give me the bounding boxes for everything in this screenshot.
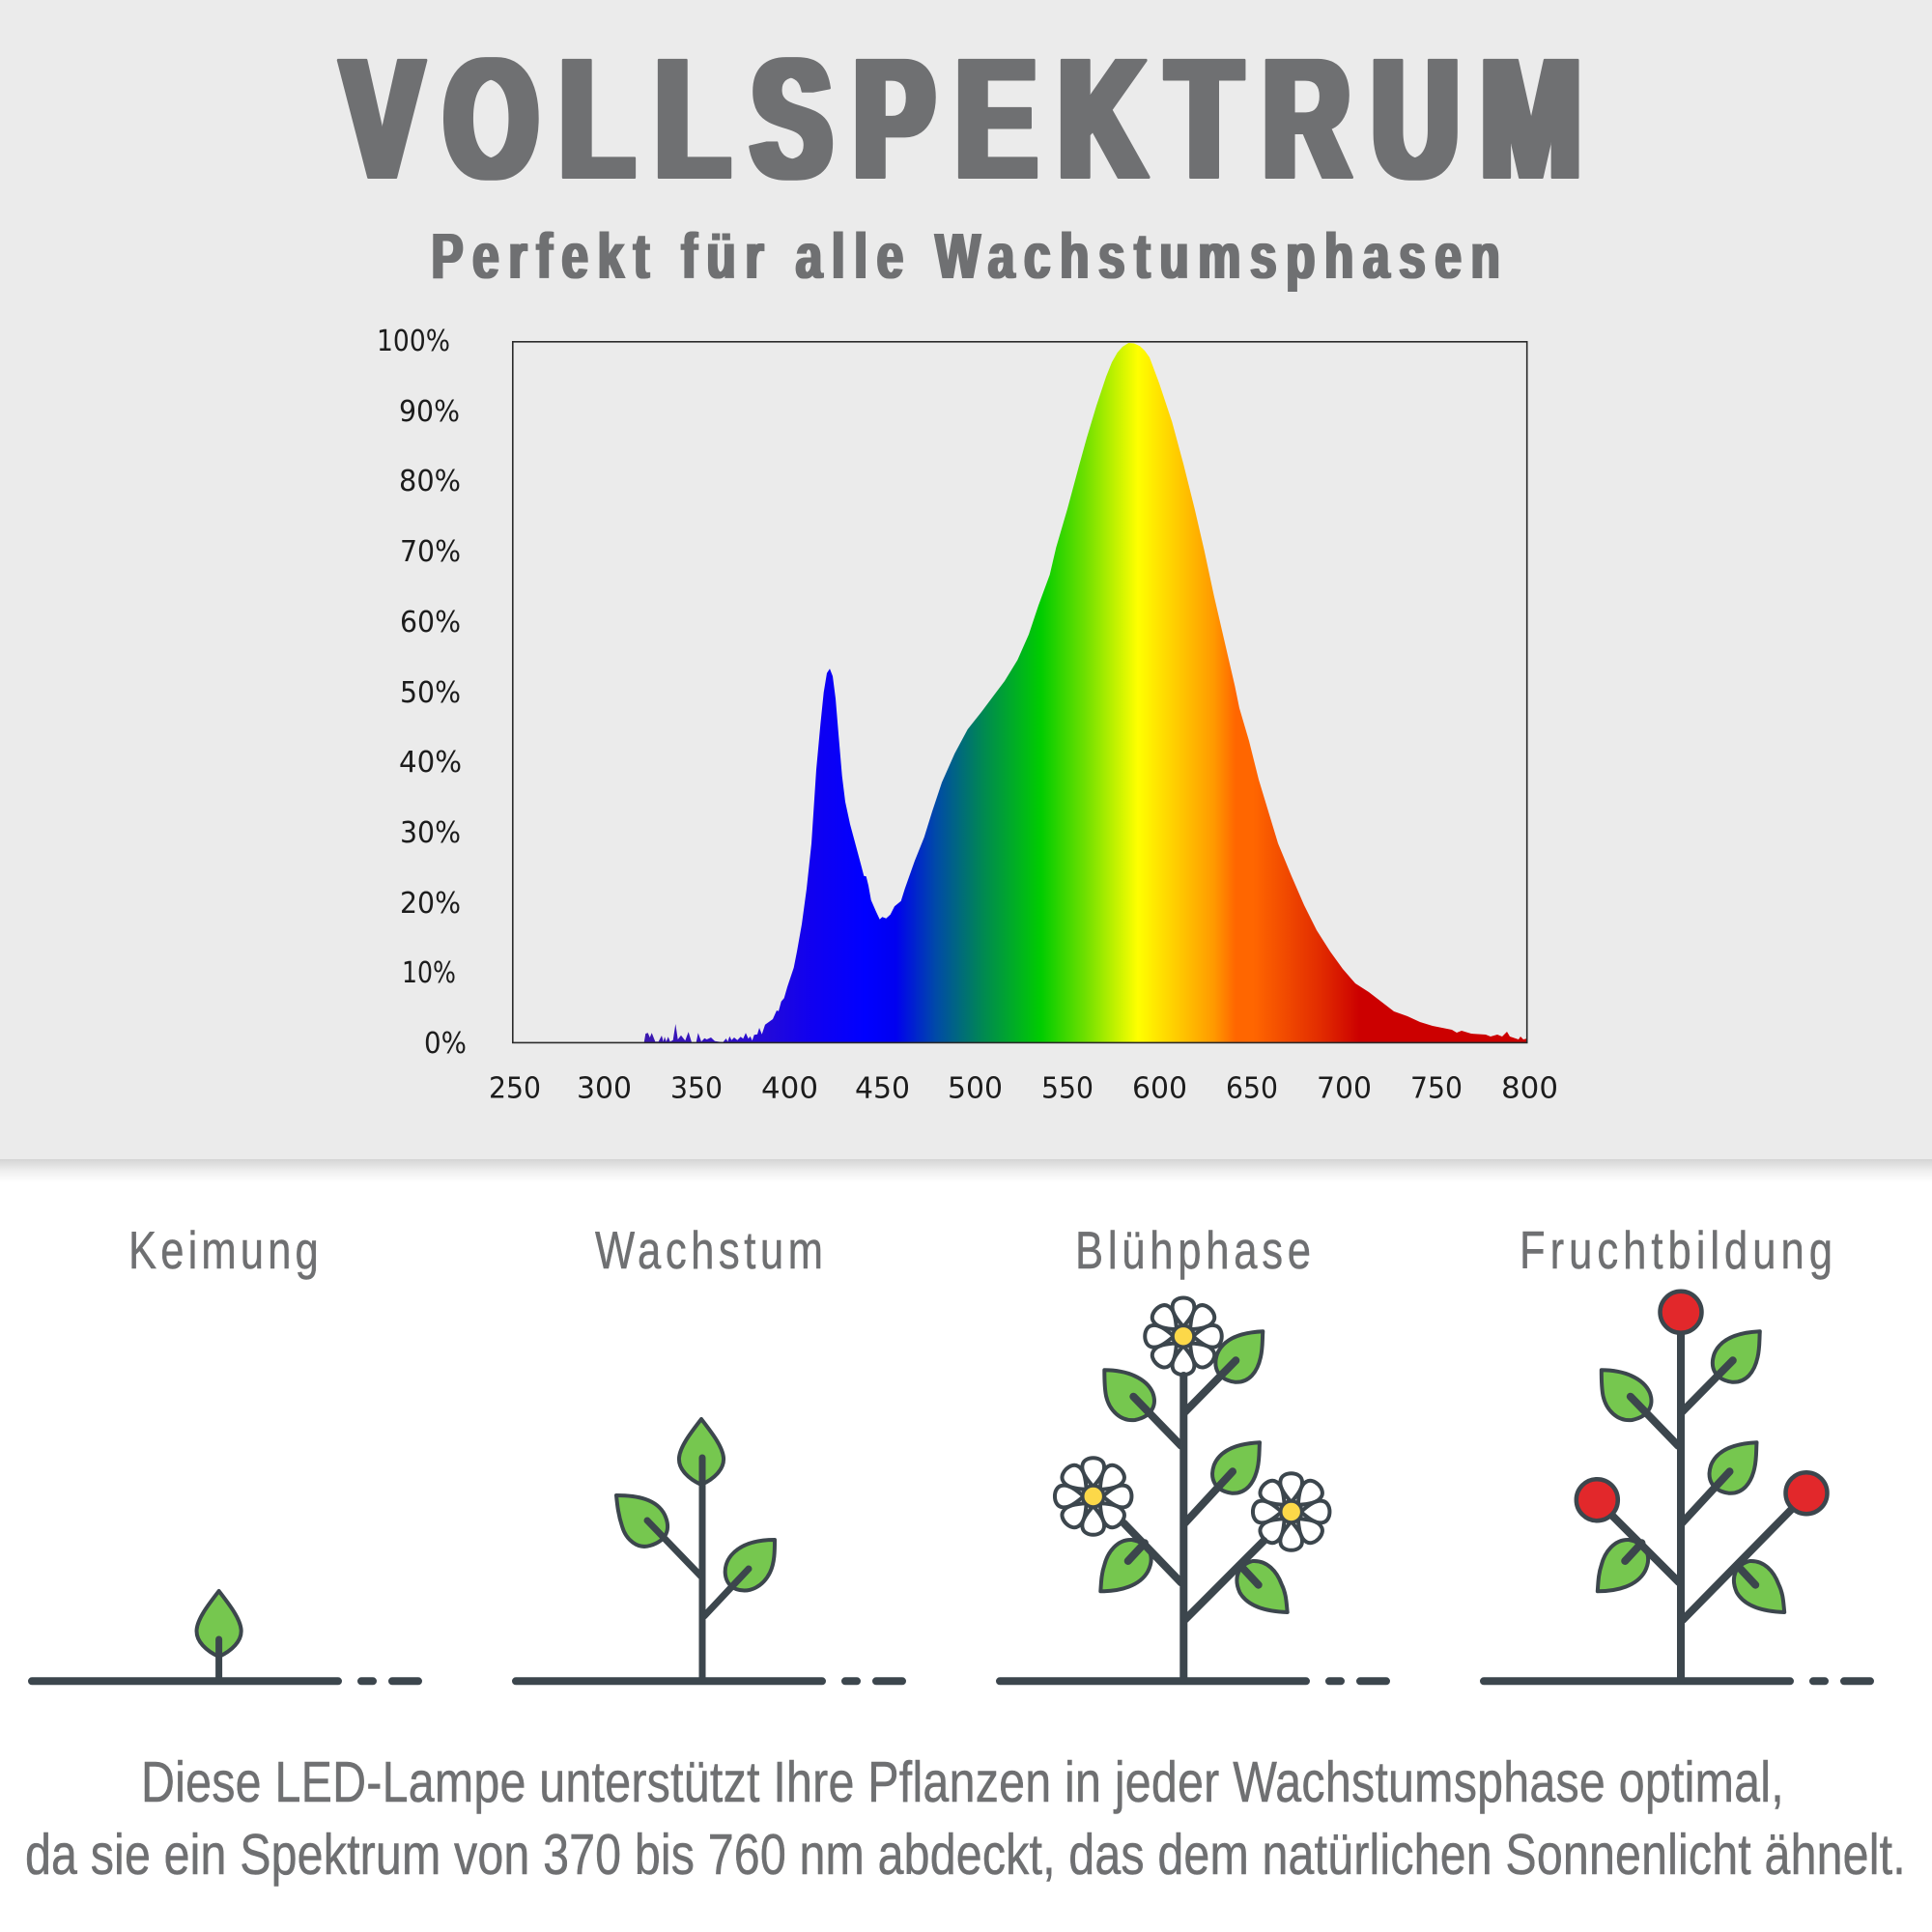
chart: spectrum — [377, 325, 1558, 1105]
y axis labels: 90% — [399, 395, 460, 429]
x axis labels: 700 — [1317, 1072, 1372, 1105]
subtitle: Perfekt für alle Wachstumsphasen — [431, 221, 1500, 293]
y axis labels: 0% — [424, 1027, 467, 1061]
y axis labels: 30% — [400, 816, 461, 850]
heading: Fruchtbildung: Fruchtbildung — [1520, 1221, 1833, 1280]
x axis labels: 750 — [1410, 1072, 1463, 1105]
x axis labels: 600 — [1132, 1072, 1187, 1105]
y axis labels: 50% — [400, 676, 461, 710]
description text: da sie ein Spektrum von 370 bis 760 nm abdeckt, das dem natürlichen Sonnenlicht ähnelt. — [25, 1824, 1906, 1887]
chart frame — [513, 342, 1527, 1042]
icon: seedling (Keimung) — [32, 1591, 418, 1681]
red fruits — [1577, 1292, 1828, 1520]
right leaf — [725, 1540, 775, 1590]
leaves — [1100, 1331, 1288, 1612]
leaf — [197, 1591, 242, 1657]
panel shadow — [0, 1159, 1932, 1182]
right flower — [1253, 1473, 1329, 1550]
stem and branches — [647, 1458, 749, 1681]
y axis labels: 70% — [400, 535, 461, 569]
icon: young plant (Wachstum) — [516, 1419, 902, 1681]
y axis labels: 100% — [377, 325, 450, 358]
description text: Diese LED-Lampe unterstützt Ihre Pflanzen in jeder Wachstumsphase optimal, — [141, 1751, 1784, 1814]
heading: Wachstum: Wachstum — [595, 1221, 823, 1280]
icon: flowering plant (Blühphase) — [1000, 1298, 1386, 1681]
heading: Blühphase: Blühphase — [1075, 1221, 1311, 1280]
stem and branches — [1611, 1333, 1792, 1681]
stem and branches — [1123, 1360, 1264, 1681]
x axis labels: 500 — [948, 1072, 1003, 1105]
x axis labels: 450 — [855, 1072, 910, 1105]
panel: grey header background — [0, 0, 1932, 1159]
x axis labels: 300 — [577, 1072, 632, 1105]
y axis labels: 80% — [399, 465, 461, 498]
x axis labels: 400 — [761, 1072, 818, 1105]
y axis labels: 10% — [402, 956, 456, 990]
ground line — [32, 1677, 418, 1685]
y axis labels: 20% — [400, 887, 461, 921]
x axis labels — [489, 1072, 1558, 1105]
x axis labels: 350 — [670, 1072, 723, 1105]
spectrum area — [644, 343, 1527, 1043]
ground line — [1484, 1677, 1870, 1685]
title: VOLLSPEKTRUM — [342, 24, 1580, 214]
top leaf — [679, 1419, 724, 1485]
left flower — [1055, 1458, 1131, 1535]
y axis labels — [377, 325, 467, 1061]
y axis labels: 60% — [400, 606, 461, 639]
stem — [215, 1639, 222, 1681]
leaves — [1598, 1331, 1784, 1612]
x axis labels: 250 — [489, 1072, 541, 1105]
description text — [25, 1751, 1906, 1887]
ground line — [1000, 1677, 1386, 1685]
top flower — [1145, 1298, 1222, 1375]
icon: fruiting plant (Fruchtbildung) — [1484, 1292, 1870, 1681]
x axis labels: 800 — [1501, 1072, 1558, 1105]
y axis labels: 40% — [399, 746, 462, 780]
left leaf — [616, 1495, 668, 1547]
ground line — [516, 1677, 902, 1685]
x axis labels: 650 — [1226, 1072, 1278, 1105]
heading: Keimung: Keimung — [128, 1221, 319, 1280]
x axis labels: 550 — [1041, 1072, 1094, 1105]
